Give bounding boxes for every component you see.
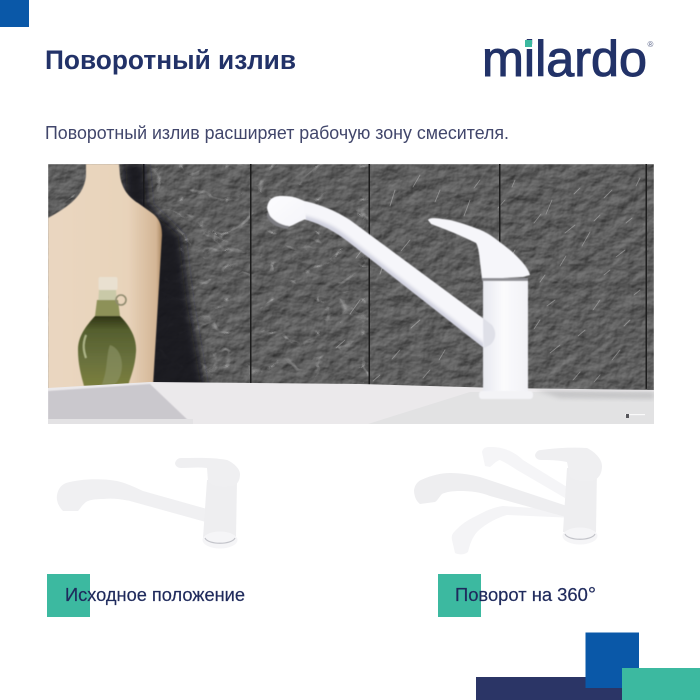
logo: milardo: ® xyxy=(648,40,654,49)
teal square xyxy=(47,574,90,617)
small faucet: rotation positions xyxy=(414,447,602,554)
body xyxy=(563,468,597,532)
counter and sink xyxy=(48,382,654,424)
caption: initial position xyxy=(47,574,245,617)
spout head xyxy=(267,196,306,227)
large white faucet xyxy=(267,196,533,399)
body xyxy=(203,480,237,538)
handle xyxy=(535,448,602,481)
handle xyxy=(175,458,240,487)
wall: stone panels xyxy=(48,164,654,394)
body xyxy=(483,281,528,391)
label: Исходное положение xyxy=(65,585,245,605)
back spout xyxy=(482,447,567,498)
decor: top-left blue square xyxy=(0,0,29,27)
teal square xyxy=(438,574,481,617)
handle xyxy=(428,218,530,279)
title: Поворотный излив xyxy=(45,45,296,75)
spout xyxy=(300,200,493,348)
label: Поворот на 360° xyxy=(455,584,596,606)
base xyxy=(479,391,533,399)
front spout xyxy=(452,506,575,554)
logo: milardo: milardo xyxy=(482,31,647,87)
caption: rotation 360 xyxy=(438,574,596,617)
main spout xyxy=(414,473,578,519)
cutting board shadow xyxy=(122,160,206,392)
spout xyxy=(57,479,215,524)
photo: kitchen faucet scene xyxy=(48,160,654,424)
base xyxy=(202,532,238,548)
subtitle text: Поворотный излив расширяет рабочую зону смесителя. xyxy=(45,123,509,143)
cutting board xyxy=(48,164,162,390)
base xyxy=(562,528,598,544)
olive oil bottle xyxy=(78,277,136,386)
decor: bottom-right blocks xyxy=(476,632,700,700)
small faucet: initial position xyxy=(57,458,240,548)
